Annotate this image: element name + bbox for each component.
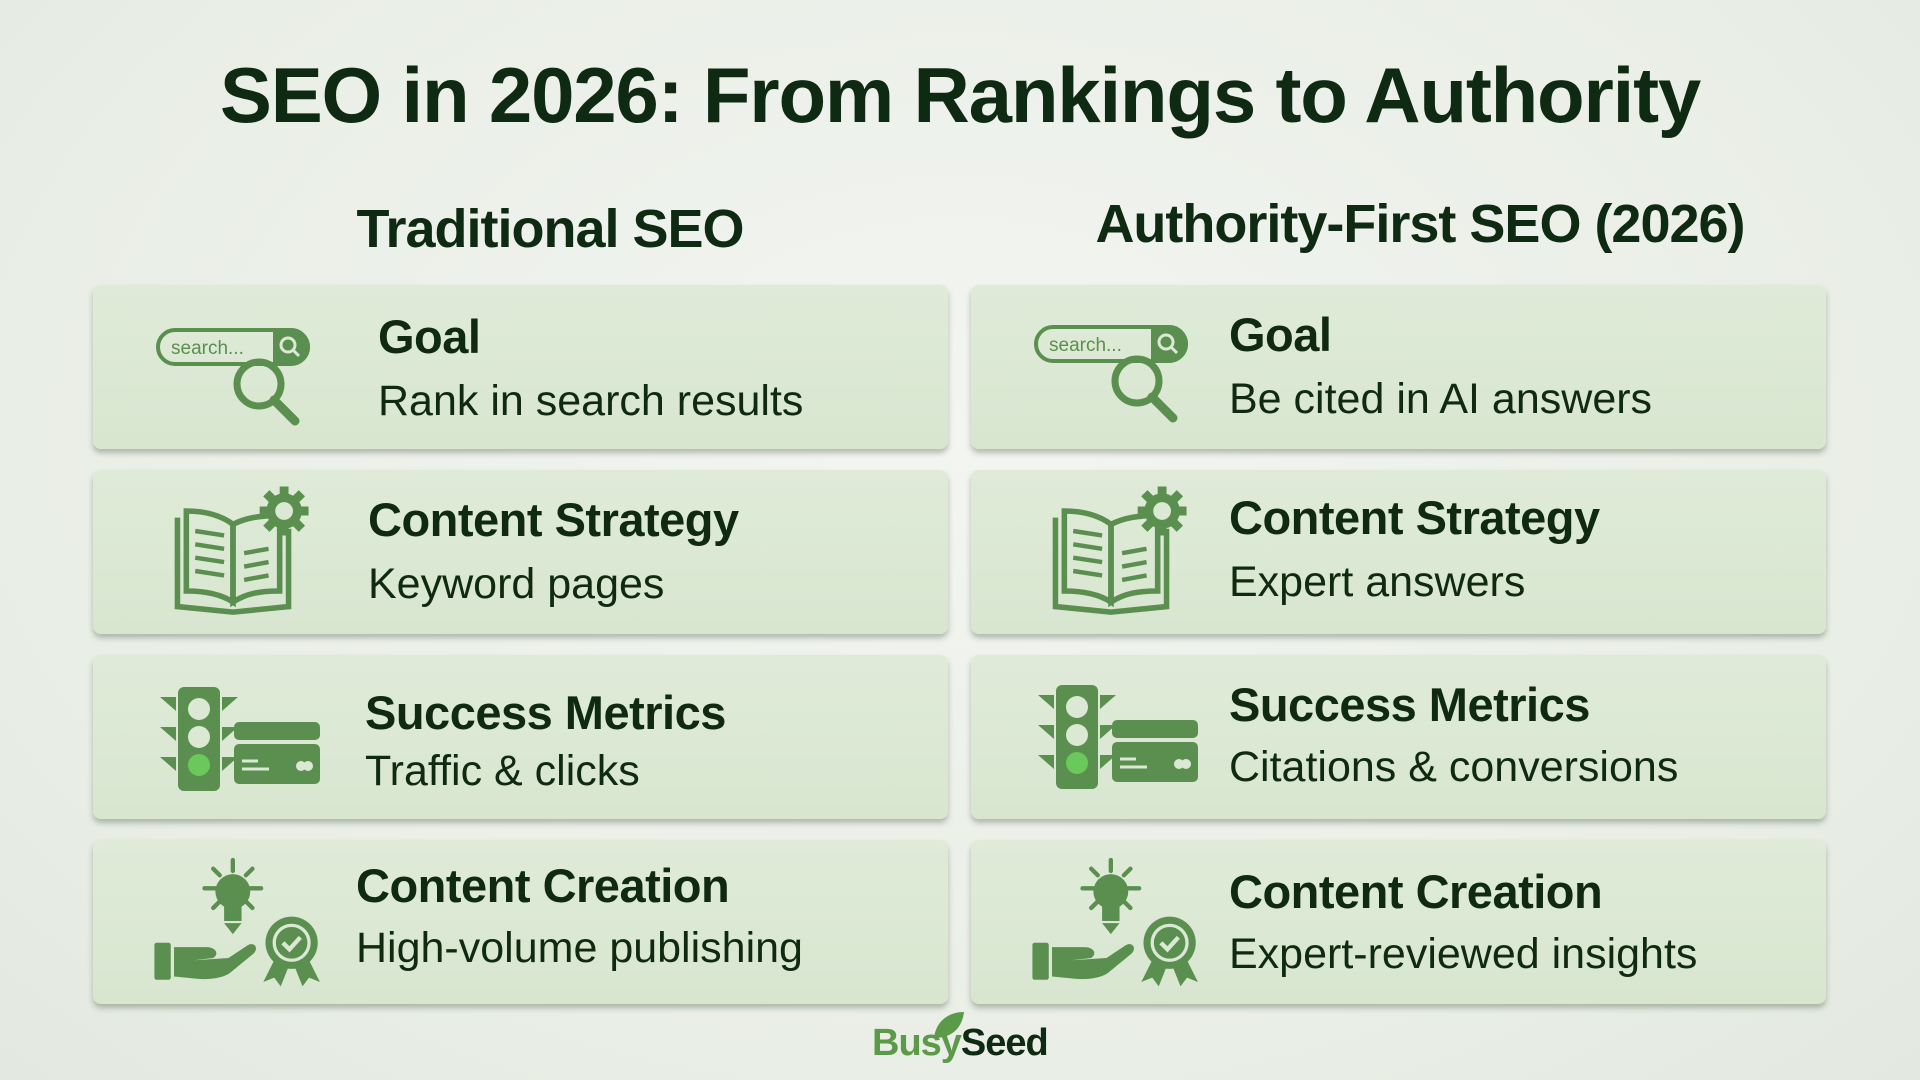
text: Success Metrics [365,686,726,739]
text [1229,865,1697,978]
card: traditional success metrics [93,655,948,819]
icon: traffic light and card [1038,685,1198,789]
icon: bulb hand badge [1032,858,1198,986]
card: authority goal [971,285,1826,449]
text: Expert-reviewed insights [1229,930,1697,978]
icon: search: search... [1049,335,1122,356]
icon: search [156,328,310,426]
text: Content Strategy [1229,491,1600,544]
text: Content Creation [1229,865,1602,918]
title: SEO in 2026: From Rankings to Authority [220,51,1700,139]
text [1229,308,1652,423]
icon: search: search... [171,338,244,359]
text [1229,678,1678,791]
text [378,310,803,425]
icon: book gear [1052,486,1187,615]
text: Goal [378,310,480,363]
text: Citations & conversions [1229,743,1678,791]
icon: bulb hand badge [154,858,320,986]
heading: authority-first: Authority-First SEO (2026) [1095,194,1745,254]
icon: book gear [174,486,309,615]
card: traditional content creation [93,840,948,1004]
text: Be cited in AI answers [1229,375,1652,423]
card: traditional content strategy [93,470,948,634]
text: Rank in search results [378,377,803,425]
text: Content Strategy [368,493,739,546]
icon: traffic light and card [160,687,320,791]
card: authority content creation [971,840,1826,1004]
text: Content Creation [356,859,729,912]
text: Success Metrics [1229,678,1590,731]
text: Expert answers [1229,558,1525,606]
text: Goal [1229,308,1331,361]
text: Traffic & clicks [365,747,640,795]
icon: search [1034,325,1188,422]
card: authority success metrics [971,655,1826,819]
logo: BusySeed [872,1022,1048,1064]
heading: traditional: Traditional SEO [356,199,744,259]
card: traditional goal [93,285,948,449]
card: authority content strategy [971,470,1826,634]
text [368,493,739,608]
text: Keyword pages [368,560,664,608]
text [1229,491,1600,606]
text [356,859,803,972]
text [365,686,726,795]
text: High-volume publishing [356,924,803,972]
